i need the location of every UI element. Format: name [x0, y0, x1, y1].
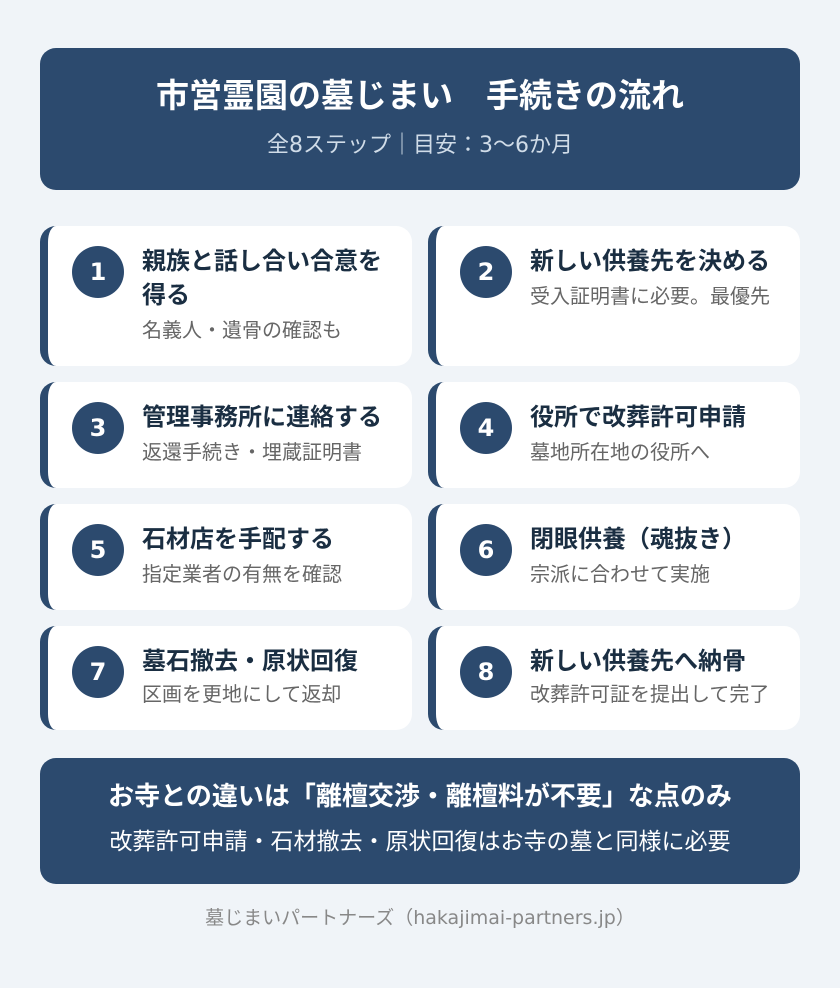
card 4: [428, 382, 800, 488]
card 3 detail: 返還手続き・埋蔵証明書: [142, 440, 362, 464]
card 8 detail: 改葬許可証を提出して完了: [530, 682, 769, 706]
card 1 detail: 名義人・遺骨の確認も: [142, 318, 342, 342]
step number 5: 5: [90, 536, 106, 564]
card 6: [428, 504, 800, 610]
card 2 detail: 受入証明書に必要。最優先: [530, 284, 770, 308]
step number 3: 3: [90, 414, 106, 442]
card 7 detail: 区画を更地にして返却: [142, 682, 341, 706]
callout heading: お寺との違いは「離檀交渉・離檀料が不要」な点のみ: [108, 782, 732, 812]
card 2: [428, 226, 800, 366]
step number 5: [72, 524, 124, 576]
step number 8: 8: [478, 658, 494, 686]
card 5 detail: 指定業者の有無を確認: [142, 562, 342, 586]
step number 8: [460, 646, 512, 698]
step number 2: [460, 246, 512, 298]
card 6 heading: 閉眼供養（魂抜き）: [530, 525, 746, 553]
card 5 heading: 石材店を手配する: [142, 525, 334, 553]
card 3: [40, 382, 412, 488]
card 6 detail: 宗派に合わせて実施: [530, 562, 710, 586]
step number 1: [72, 246, 124, 298]
card 3 heading: 管理事務所に連絡する: [142, 403, 382, 431]
card 4 heading: 役所で改葬許可申請: [530, 403, 746, 431]
card 7 heading: 墓石撤去・原状回復: [142, 647, 358, 675]
card 7: [40, 626, 412, 730]
step number 6: [460, 524, 512, 576]
subtitle: 全8ステップ｜目安：3〜6か月: [267, 133, 573, 158]
header panel: [40, 48, 800, 190]
step number 4: [460, 402, 512, 454]
step number 1: 1: [90, 258, 106, 286]
card 5: [40, 504, 412, 610]
step number 7: [72, 646, 124, 698]
card 8 heading: 新しい供養先へ納骨: [530, 647, 746, 675]
card 4 detail: 墓地所在地の役所へ: [530, 440, 710, 464]
title: 市営霊園の墓じまい 手続きの流れ: [156, 76, 684, 115]
step number 2: 2: [478, 258, 494, 286]
step number 6: 6: [478, 536, 494, 564]
card 1 heading: 親族と話し合い合意を得る: [142, 247, 382, 309]
card 1: [40, 226, 412, 366]
step number 7: 7: [90, 658, 106, 686]
step number 3: [72, 402, 124, 454]
footer credit: 墓じまいパートナーズ（hakajimai-partners.jp）: [205, 907, 635, 929]
card 8: [428, 626, 800, 730]
bottom callout panel: [40, 758, 800, 884]
callout detail: 改葬許可申請・石材撤去・原状回復はお寺の墓と同様に必要: [110, 829, 730, 855]
card 2 heading: 新しい供養先を決める: [530, 247, 770, 275]
step number 4: 4: [478, 414, 494, 442]
